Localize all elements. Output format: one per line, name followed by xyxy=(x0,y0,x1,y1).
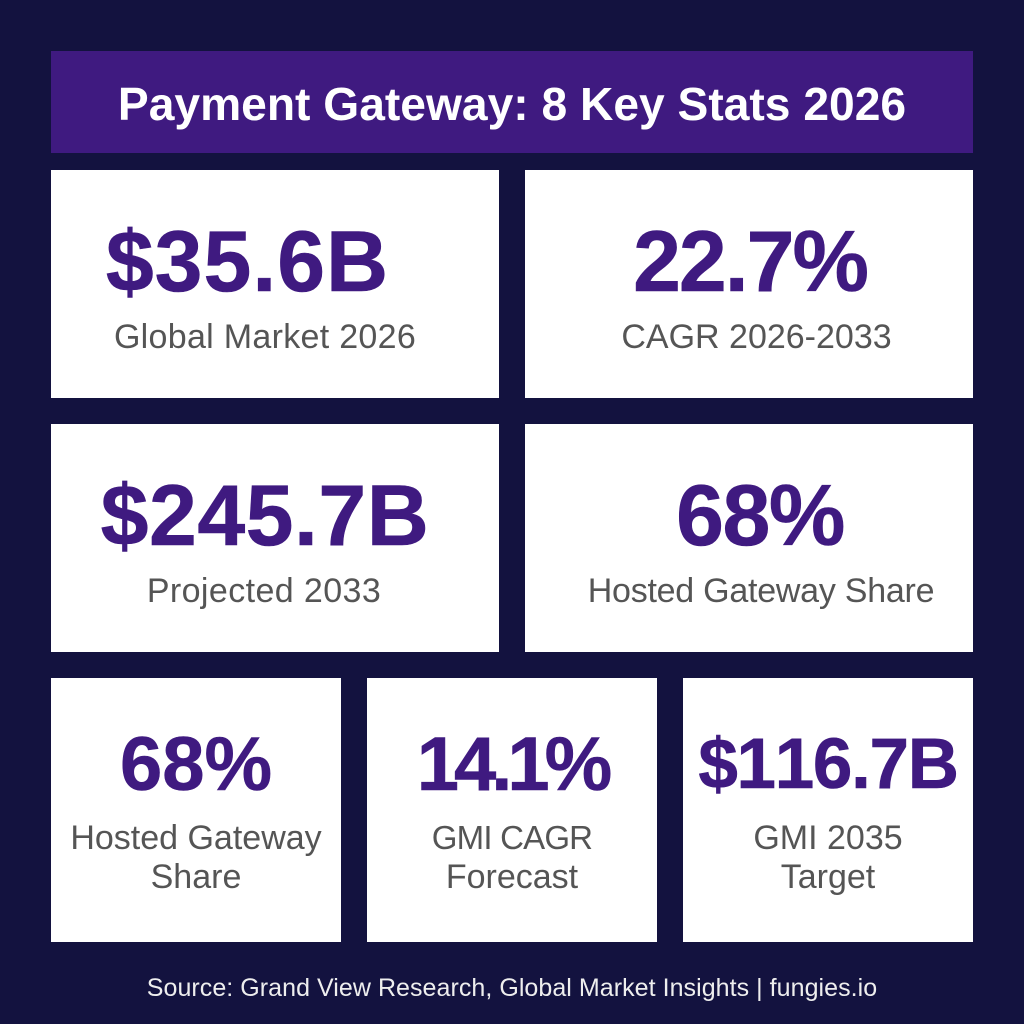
label xyxy=(70,819,322,896)
label: Projected 2033 xyxy=(147,572,381,610)
stat card: hosted gateway share xyxy=(525,424,973,652)
value: $116.7B xyxy=(698,725,958,804)
label: GMI CAGR xyxy=(432,819,592,856)
stat card: hosted gateway share small xyxy=(51,678,341,942)
label: Target xyxy=(781,858,875,896)
source footer: Source: Grand View Research, Global Market Insights | fungies.io xyxy=(147,974,877,1002)
value: 14.1% xyxy=(417,722,607,807)
value: 68% xyxy=(676,468,844,564)
label: Hosted Gateway Share xyxy=(588,572,934,610)
stat card: projected xyxy=(51,424,499,652)
stat card: GMI target xyxy=(683,678,973,942)
label xyxy=(753,819,903,896)
value: $35.6B xyxy=(106,214,389,310)
label: GMI 2035 xyxy=(753,819,903,857)
value: $245.7B xyxy=(101,468,429,564)
label: CAGR 2026-2033 xyxy=(621,318,892,356)
label: Global Market 2026 xyxy=(114,318,416,356)
title banner: Payment Gateway: 8 Key Stats 2026 xyxy=(118,78,906,130)
value: 68% xyxy=(120,722,272,807)
stat card: CAGR xyxy=(525,170,973,398)
title banner xyxy=(51,51,973,153)
stat card: global market xyxy=(51,170,499,398)
label: Share xyxy=(151,858,241,896)
label: Forecast xyxy=(446,858,578,896)
label xyxy=(432,819,592,896)
value: 22.7% xyxy=(633,214,867,310)
stat card: GMI CAGR xyxy=(367,678,657,942)
label: Hosted Gateway xyxy=(70,819,322,857)
